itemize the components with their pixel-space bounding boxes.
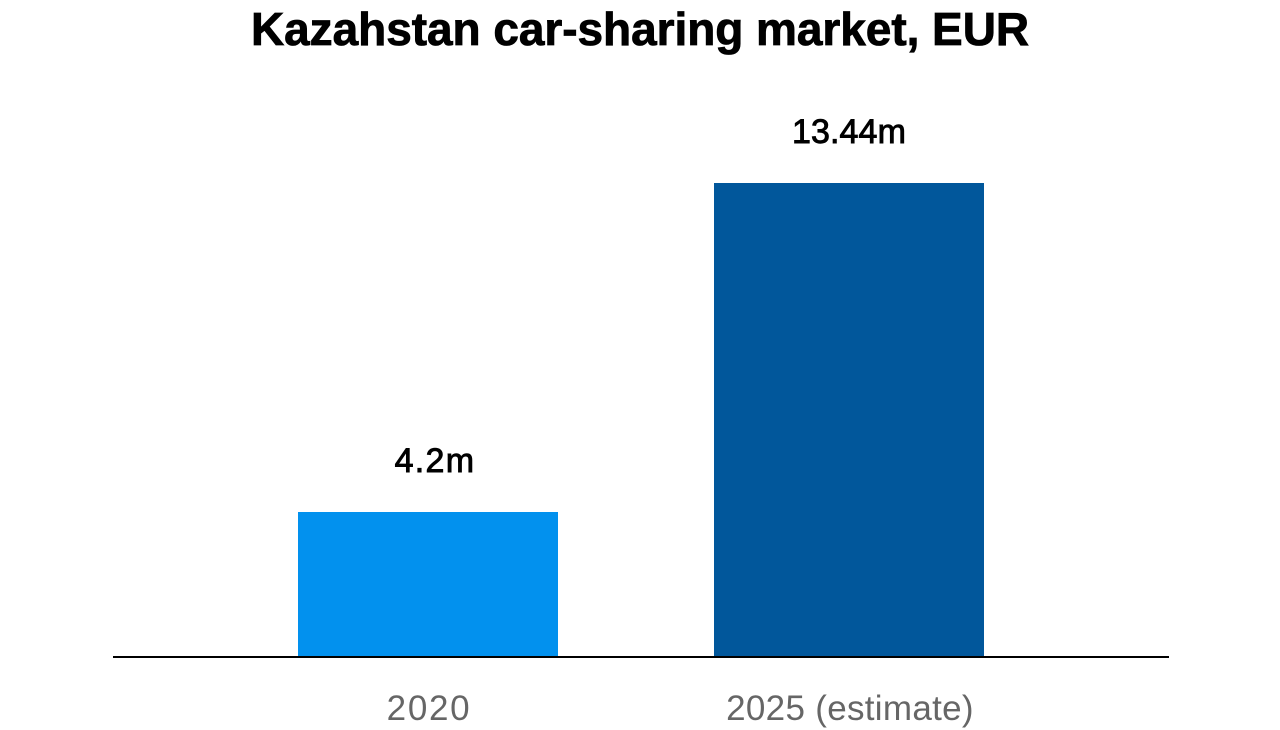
- category label: 2020: 2020: [387, 689, 471, 728]
- value label: 2025: 13.44m: [792, 113, 906, 151]
- bar: 2025 estimate: [714, 183, 984, 657]
- bar: 2020: [298, 512, 558, 657]
- title: Kazahstan car-sharing market, EUR: [251, 3, 1029, 55]
- x axis line: [113, 656, 1169, 658]
- category label: 2025 (estimate): 2025 (estimate): [726, 689, 974, 728]
- value label: 2020: 4.2m: [395, 442, 475, 480]
